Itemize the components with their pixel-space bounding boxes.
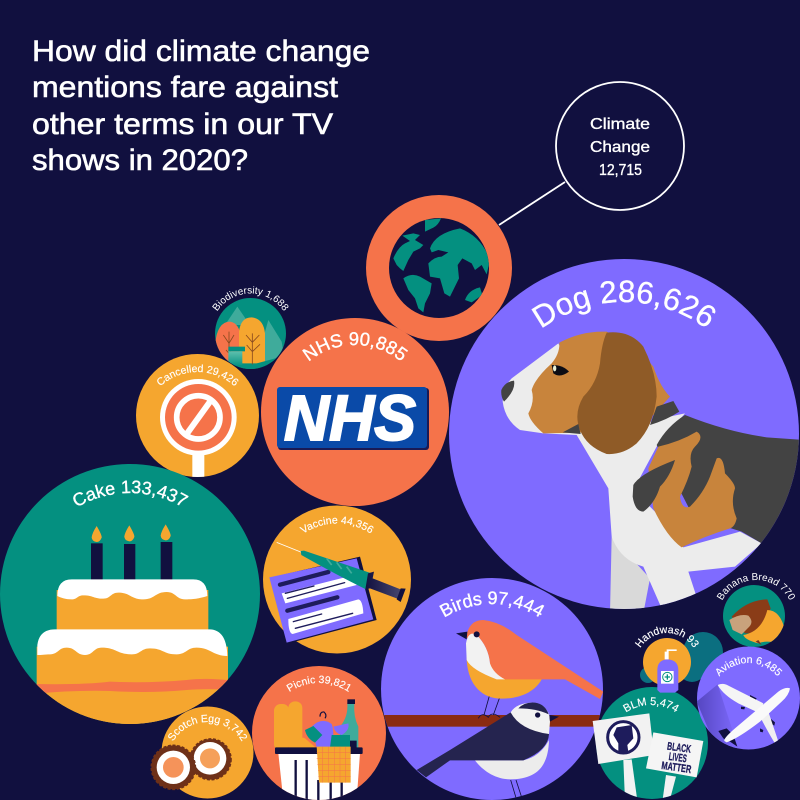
panel: birds bbox=[381, 578, 603, 800]
label: BLM 5,474: BLM 5,474 bbox=[622, 697, 679, 712]
label: Banana Bread 770: Banana Bread 770 bbox=[716, 573, 795, 600]
illustration: banana bread bbox=[729, 599, 785, 645]
callout: climate change 12,715: Climate bbox=[590, 116, 650, 133]
label: Handwash 93: Handwash 93 bbox=[634, 626, 699, 648]
panel: aviation bbox=[697, 646, 800, 750]
callout: climate change 12,715: Change bbox=[590, 139, 650, 156]
label: Scotch Egg 3,742: Scotch Egg 3,742 bbox=[168, 714, 248, 742]
label: Cancelled 29,426: Cancelled 29,426 bbox=[157, 364, 238, 386]
illustration: protest signs bbox=[593, 713, 703, 777]
panel: BLM bbox=[592, 687, 708, 799]
icon: cancelled sign bbox=[160, 379, 237, 480]
label: NHS 90,885: NHS 90,885 bbox=[302, 332, 408, 362]
illustration: cake bbox=[36, 524, 228, 724]
illustration: vaccine card and syringe bbox=[269, 542, 406, 643]
panel: banana bread bbox=[716, 573, 795, 647]
text: Black Lives Matter bbox=[661, 740, 695, 776]
illustration: sign poles bbox=[623, 759, 676, 800]
label: Dog 286,626: Dog 286,626 bbox=[532, 280, 716, 328]
panel: picnic bbox=[252, 666, 386, 800]
label: Aviation 6,485: Aviation 6,485 bbox=[716, 656, 782, 677]
panel: NHS bbox=[261, 318, 449, 506]
text: Black Lives Matter: BLACK bbox=[666, 741, 692, 756]
title: other terms in our TV bbox=[32, 108, 333, 141]
panel: dog bbox=[449, 259, 799, 609]
panel: biodiversity bbox=[212, 286, 288, 369]
illustration: picnic basket bbox=[274, 699, 363, 800]
callout: climate change 12,715 bbox=[499, 82, 684, 225]
illustration: aeroplane bbox=[697, 684, 790, 753]
label: Vaccine 44,356: Vaccine 44,356 bbox=[299, 516, 374, 533]
label: Birds 97,444: Birds 97,444 bbox=[439, 591, 544, 618]
illustration: dog bbox=[501, 332, 800, 613]
label: Biodiversity 1,688: Biodiversity 1,688 bbox=[212, 286, 288, 311]
label: Cake 133,437: Cake 133,437 bbox=[73, 480, 189, 506]
illustration: handwash bottle bbox=[657, 649, 678, 693]
panel: vaccine bbox=[263, 506, 411, 654]
title: mentions fare against bbox=[32, 71, 338, 104]
illustration: scotch eggs bbox=[151, 739, 231, 789]
text: Black Lives Matter: MATTER bbox=[661, 760, 692, 776]
panel: scotch egg bbox=[150, 706, 254, 798]
label: Picnic 39,821: Picnic 39,821 bbox=[286, 676, 351, 692]
title: How did climate change bbox=[32, 35, 370, 68]
panel: handwash bbox=[634, 626, 723, 693]
panel: cancelled bbox=[136, 354, 259, 477]
panel: globe bbox=[366, 195, 512, 341]
text: Black Lives Matter: LIVES bbox=[668, 751, 687, 765]
icon: NHS logo: NHS bbox=[284, 382, 416, 454]
callout: climate change 12,715: 12,715 bbox=[599, 162, 642, 179]
title: shows in 2020? bbox=[32, 144, 248, 177]
illustration: trees bbox=[216, 306, 283, 369]
illustration: two birds on a branch bbox=[380, 620, 607, 800]
panel: cake bbox=[0, 464, 260, 724]
title bbox=[32, 35, 370, 177]
